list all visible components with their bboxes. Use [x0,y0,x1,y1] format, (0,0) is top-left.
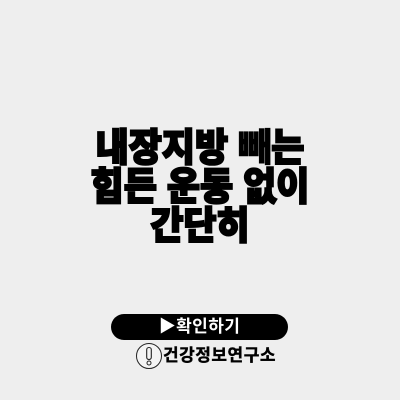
title: 내장지방 빼는 [96,125,304,170]
button: confirm [111,314,288,340]
icon: exclamation mark in circle [136,343,162,369]
brand name: 건강정보연구소 [163,346,276,365]
title: 간단히 [150,203,250,248]
title [91,125,309,248]
button: confirm: ▶확인하기 [159,317,240,336]
title: 힘든 운동 없이 [91,164,309,209]
